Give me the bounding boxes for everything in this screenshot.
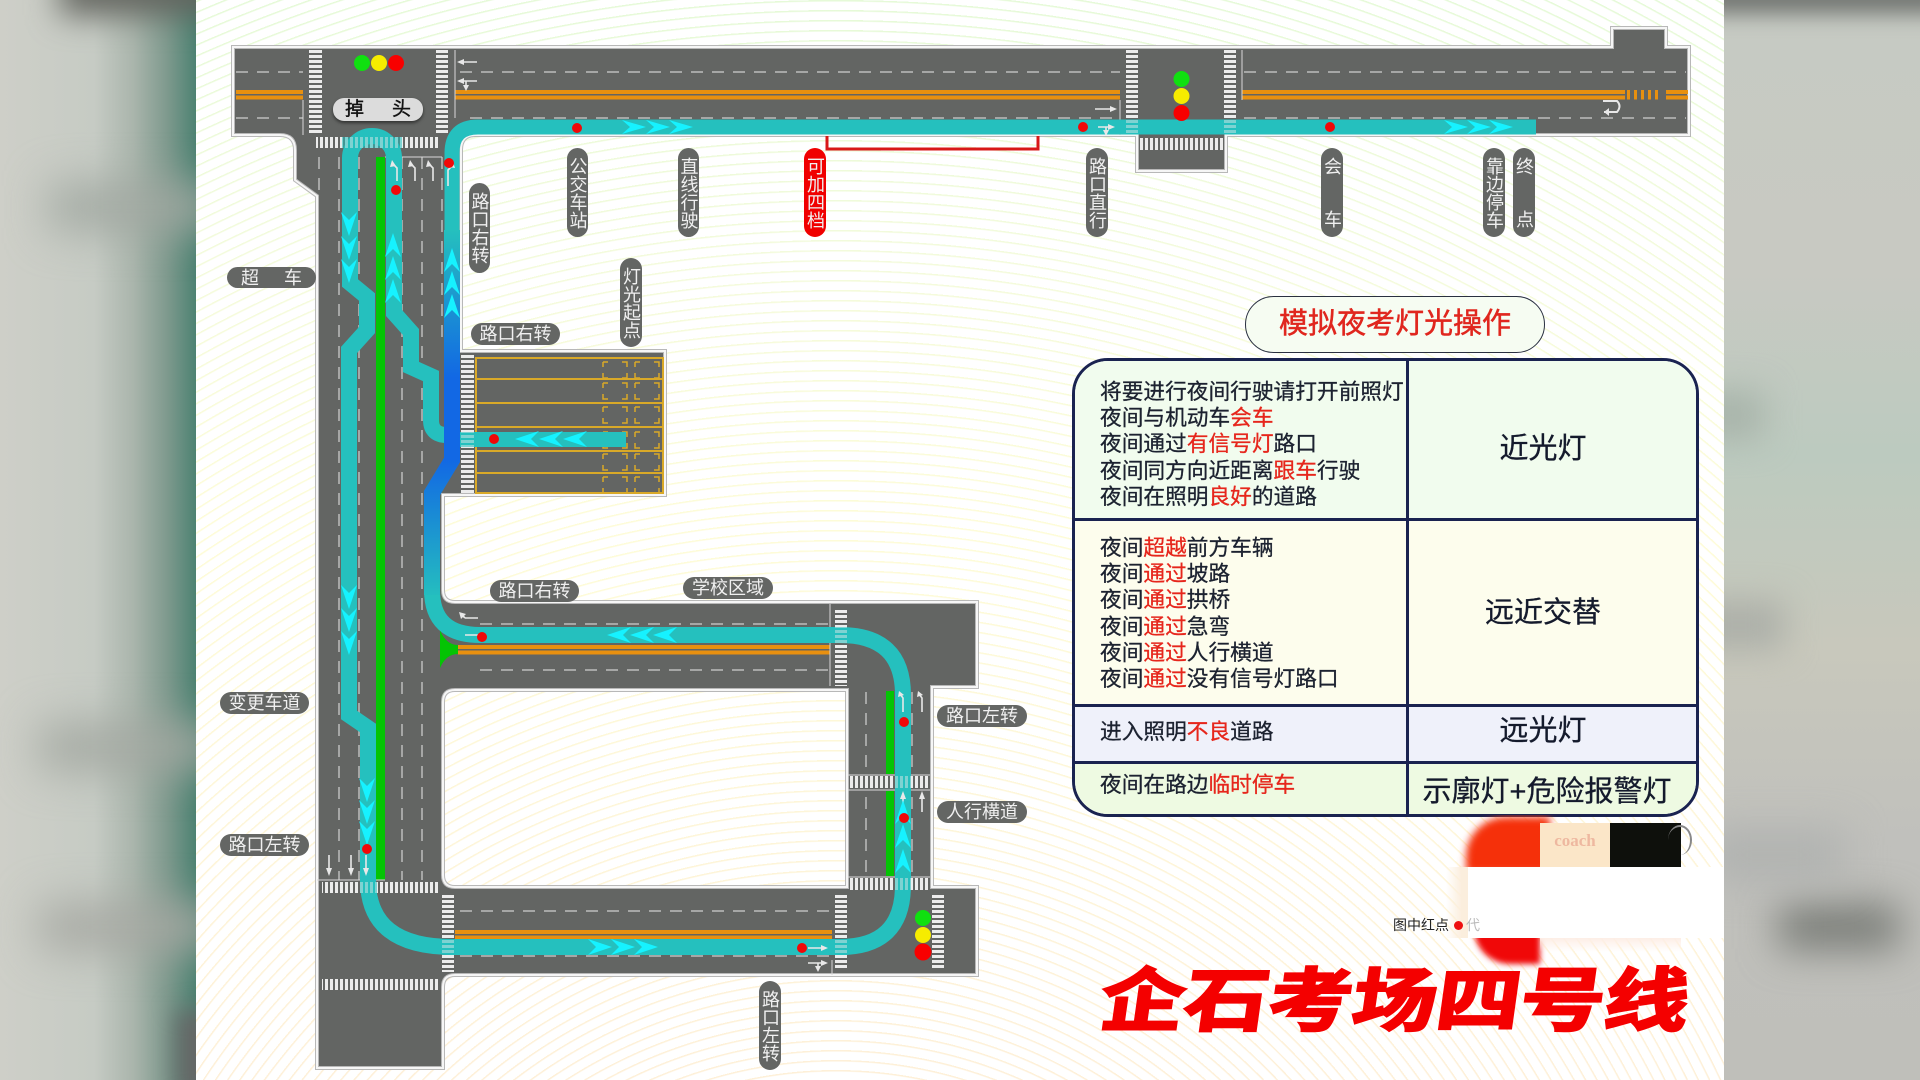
row: low beam: 将要进行夜间行驶请打开前照灯 xyxy=(1100,379,1404,404)
row: low beam: 夜间与机动车会车 xyxy=(1100,405,1274,430)
traffic light: lower right junction xyxy=(914,910,932,960)
route overlay across crosswalks xyxy=(342,120,1236,955)
label: U-turn: 掉 xyxy=(345,99,364,120)
row: alternating beam: 夜间通过坡路 xyxy=(1100,561,1230,586)
label: overtaking: 车 xyxy=(284,268,302,288)
row: low beam: 近光灯 xyxy=(1499,433,1586,465)
label: passing vehicle xyxy=(1321,148,1343,237)
lane arrows xyxy=(329,62,1620,968)
row: alternating beam xyxy=(1075,521,1696,707)
column divider xyxy=(1406,361,1409,820)
red bracket: fourth gear section xyxy=(827,136,1038,149)
label: straight through junction: 路口直行 xyxy=(1087,156,1107,228)
red checkpoint dots xyxy=(362,122,1335,953)
left blurred side band xyxy=(0,0,196,1080)
row: alternating beam: 夜间超越前方车辆 xyxy=(1100,535,1274,560)
row: alternating beam: 夜间通过没有信号灯路口 xyxy=(1100,666,1339,691)
page background xyxy=(196,0,1724,1080)
legend: red dot note: 图中红点 代 xyxy=(1393,917,1480,933)
row: low beam: 夜间通过有信号灯路口 xyxy=(1100,431,1317,456)
row: high beam: 进入照明不良道路 xyxy=(1100,719,1274,744)
row: high beam: 远光灯 xyxy=(1499,715,1586,747)
lane arrow heads xyxy=(326,59,1609,972)
traffic light: straight junction xyxy=(1174,71,1190,121)
label: bus stop: 公交车站 xyxy=(568,156,588,228)
row: low beam xyxy=(1075,361,1696,521)
label: lane change: 变更车道 xyxy=(228,693,300,713)
row: low beam: 夜间在照明良好的道路 xyxy=(1100,484,1317,509)
route: teal driving path xyxy=(349,127,1536,947)
heading: night lighting simulation: 模拟夜考灯光操作 xyxy=(1279,308,1511,340)
row: hazard lights: 示廓灯+危险报警灯 xyxy=(1423,776,1671,808)
label: right turn 3: 路口右转 xyxy=(498,581,570,601)
label: overtaking xyxy=(227,267,316,288)
heading: night lighting simulation xyxy=(1245,296,1545,353)
right blurred side band xyxy=(1724,0,1920,1080)
chevrons xyxy=(341,120,1513,955)
watermark logo remnant: coach xyxy=(1554,831,1596,850)
panel: lighting table xyxy=(1072,358,1699,817)
lane dashes xyxy=(236,72,1686,956)
label: pull over: 靠边停车 xyxy=(1484,156,1504,228)
main title: 企石考场四号线 xyxy=(1096,962,1694,1040)
road network xyxy=(233,28,1689,1068)
crosswalks xyxy=(309,50,1236,990)
label: overtaking: 超 xyxy=(241,268,259,288)
label: end point: 终 xyxy=(1514,157,1534,175)
label: pedestrian crossing: 人行横道 xyxy=(946,802,1018,822)
test pad yellow bays xyxy=(476,358,663,493)
label: left turn bottom: 路口左转 xyxy=(760,990,780,1062)
label: passing vehicle: 车 xyxy=(1322,210,1342,228)
orange centre lines xyxy=(236,90,1688,940)
row: alternating beam: 夜间通过人行横道 xyxy=(1100,640,1274,665)
label: right turn 1 vertical: 路口右转 xyxy=(470,192,490,264)
label: end point xyxy=(1513,148,1535,237)
label: fourth gear: 可加四档 xyxy=(805,156,825,228)
watermark logo remnant xyxy=(1450,815,1724,969)
stop lines xyxy=(303,50,1242,975)
label: left turn right side: 路口左转 xyxy=(946,706,1018,726)
label: school zone: 学校区域 xyxy=(692,578,764,598)
row: alternating beam: 夜间通过急弯 xyxy=(1100,614,1230,639)
label: right turn 2: 路口右转 xyxy=(480,324,552,344)
row: low beam: 夜间同方向近距离跟车行驶 xyxy=(1100,458,1360,483)
label: end point: 点 xyxy=(1514,210,1534,228)
label: left turn lower left: 路口左转 xyxy=(228,835,300,855)
label: lighting start: 灯光起点 xyxy=(621,266,641,338)
label: U-turn: 头 xyxy=(392,99,411,120)
label: straight driving: 直线行驶 xyxy=(678,156,698,228)
row: alternating beam: 夜间通过拱桥 xyxy=(1100,587,1230,612)
row: alternating beam: 远近交替 xyxy=(1485,597,1601,629)
row: hazard lights: 夜间在路边临时停车 xyxy=(1100,772,1295,797)
label: U-turn xyxy=(333,98,423,121)
green medians xyxy=(376,157,894,880)
row: high beam xyxy=(1075,707,1696,764)
traffic light: U-turn junction xyxy=(354,55,404,71)
row: hazard lights xyxy=(1075,764,1696,820)
label: passing vehicle: 会 xyxy=(1322,157,1342,175)
